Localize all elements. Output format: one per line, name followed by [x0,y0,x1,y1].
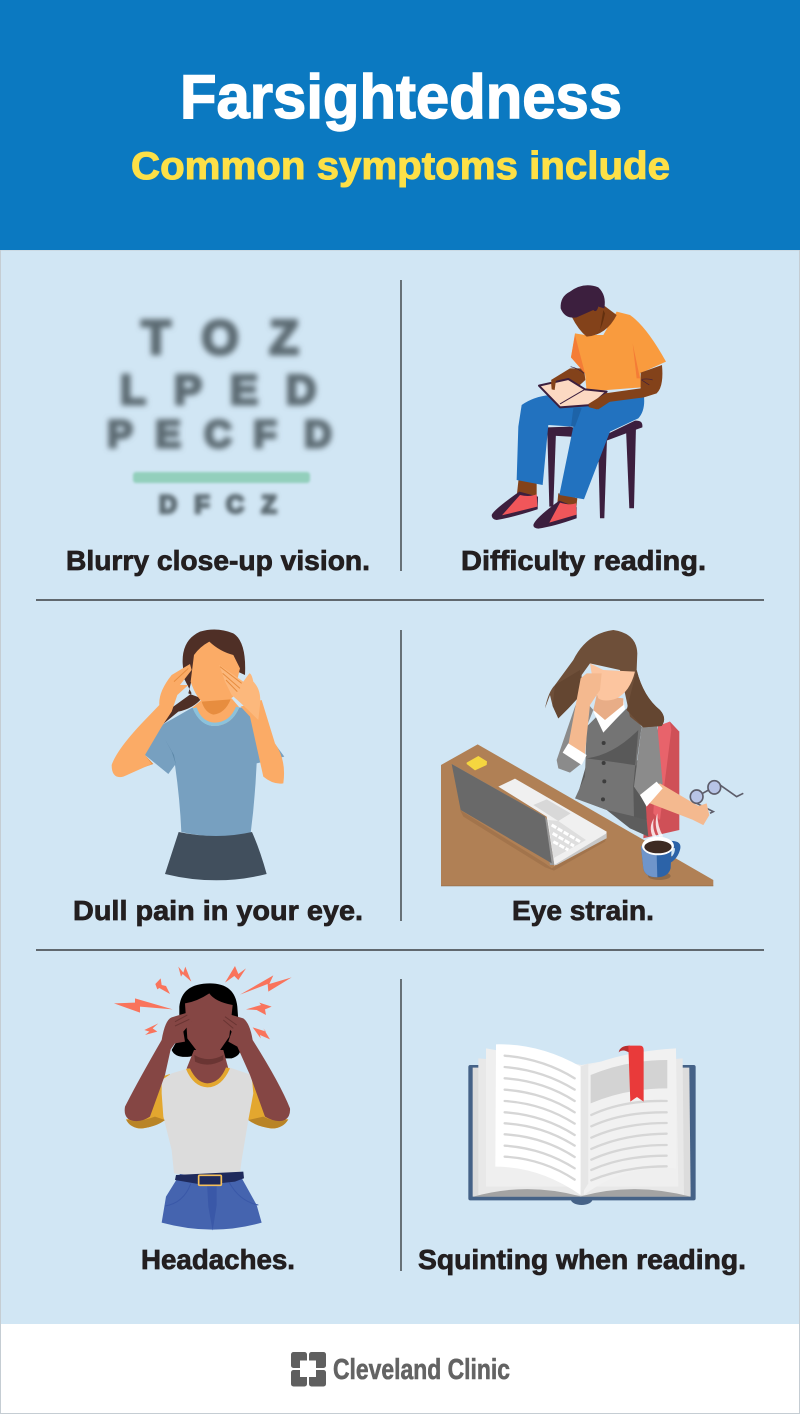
header band [0,0,800,250]
icon: blurry eye chart: D [304,414,332,456]
icon: blurry eye chart: C [204,414,232,456]
icon: blurry eye chart: Z [269,312,299,365]
icon: blurry eye chart: E [230,366,258,413]
icon: blurry eye chart: D [159,491,177,519]
icon: blurry eye chart: F [253,414,277,456]
panel: light blue background [0,250,800,1324]
footer background [0,1324,800,1414]
icon: blurry eye chart: T [141,312,171,365]
label: blurry vision: Blurry close-up vision. [66,545,370,576]
icon: woman with headache [114,966,292,1231]
label: squinting: Squinting when reading. [418,1244,746,1275]
icon: blurry eye chart: O [201,312,239,365]
icon: open book with bookmark [468,1044,696,1205]
icon: blurry eye chart: D [286,366,316,413]
label: reading: Difficulty reading. [461,545,706,576]
icon: blurry eye chart: F [194,491,210,519]
icon: blurry eye chart: Z [261,491,277,519]
logo: Cleveland Clinic [291,1352,510,1386]
icon: woman at desk with eye strain [441,630,743,886]
icon: woman covering eye [112,630,284,880]
title: Farsightedness [180,63,622,132]
subtitle: Common symptoms include [131,145,670,188]
icon: blurry eye chart: C [226,491,244,519]
label: headaches: Headaches. [141,1244,295,1275]
icon: blurry eye chart: L [120,366,146,413]
icon: blurry eye chart: P [107,414,133,456]
label: eye pain: Dull pain in your eye. [73,895,363,926]
icon: blurry eye chart [107,312,332,519]
icon: blurry eye chart: E [155,414,181,456]
icon: blurry eye chart: P [174,366,202,413]
logo: Cleveland Clinic: Cleveland Clinic [333,1354,510,1386]
icon: man reading on stool [492,285,666,529]
label: eye strain: Eye strain. [512,895,654,926]
